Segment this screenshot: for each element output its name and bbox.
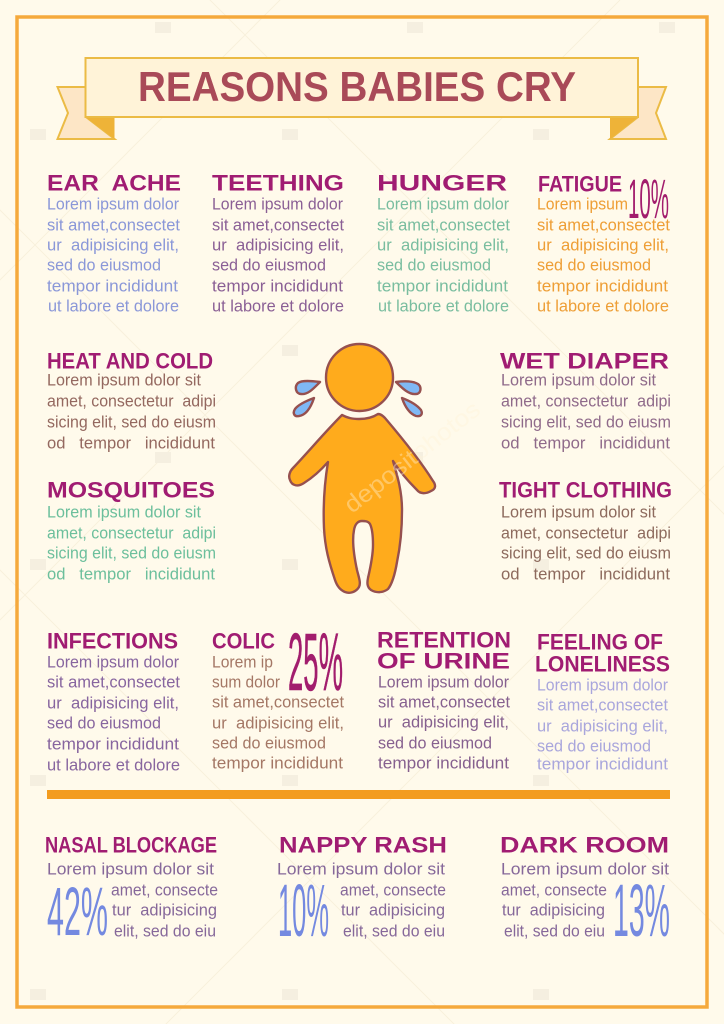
panel: mosquitoes: MOSQUITOES <box>47 478 215 502</box>
panel: tight clothing: Lorem ipsum dolor sit <box>501 504 656 522</box>
panel: retention of urine: OF URINE <box>377 648 510 674</box>
panel: hunger: Lorem ipsum dolor <box>377 196 509 214</box>
panel: fatigue <box>537 167 670 316</box>
panel: nasal blockage: amet, consecte <box>111 882 218 900</box>
panel: nasal blockage: Lorem ipsum dolor sit <box>47 861 214 879</box>
ribbon tail left <box>58 87 114 139</box>
panel: nappy rash: tur adipisicing <box>341 902 445 920</box>
panel: dark room: Lorem ipsum dolor sit <box>501 861 669 879</box>
panel: heat and cold: sicing elit, sed do eiusm <box>47 414 216 432</box>
watermark: depositphotos <box>339 396 486 519</box>
panel: hunger: tempor incididunt <box>377 278 508 296</box>
panel: nappy rash: Lorem ipsum dolor sit <box>277 861 445 879</box>
panel: feeling of loneliness: sit amet,consectet <box>537 697 668 715</box>
panel: dark room: DARK ROOM <box>500 832 669 858</box>
panel: nasal blockage <box>45 832 218 950</box>
panel: tight clothing: sicing elit, sed do eiusm <box>501 545 671 563</box>
panel: heat and cold: HEAT AND COLD <box>47 348 213 374</box>
panel: heat and cold: Lorem ipsum dolor sit <box>47 372 201 390</box>
panel: colic: tempor incididunt <box>212 755 343 773</box>
panel: feeling of loneliness: ur adipisicing elit, <box>537 718 668 736</box>
panel: infections: ut labore et dolore <box>47 757 180 775</box>
panel: ear ache: ur adipisicing elit, <box>47 237 179 255</box>
panel: teething: ur adipisicing elit, <box>212 237 344 255</box>
panel: retention of urine: sit amet,consectet <box>378 694 510 712</box>
panel: ear ache <box>47 170 181 316</box>
panel: teething: Lorem ipsum dolor <box>212 196 343 214</box>
panel: infections: sit amet,consectet <box>47 674 180 692</box>
panel: feeling of loneliness: Lorem ipsum dolor <box>537 677 668 695</box>
panel: dark room <box>500 832 670 952</box>
panel: fatigue: tempor incididunt <box>537 278 668 296</box>
section divider <box>47 790 670 799</box>
panel: mosquitoes <box>47 478 216 584</box>
panel: infections <box>47 628 180 775</box>
panel: ear ache: sit amet,consectet <box>47 217 180 235</box>
panel: infections: sed do eiusmod <box>47 715 161 733</box>
panel: hunger: sed do eiusmod <box>377 257 491 275</box>
panel: ear ache: ut labore et dolore <box>48 298 179 316</box>
panel: nasal blockage: tur adipisicing <box>112 902 217 920</box>
panel: wet diaper: Lorem ipsum dolor sit <box>501 372 656 390</box>
panel: tight clothing: amet, consectetur adipi <box>501 525 671 543</box>
ribbon main <box>86 58 638 117</box>
panel: retention of urine: RETENTION <box>377 628 511 652</box>
panel: fatigue: sit amet,consectet <box>537 217 670 235</box>
panel: infections: Lorem ipsum dolor <box>47 654 179 672</box>
tear drop upper left <box>296 381 320 394</box>
panel: wet diaper <box>500 348 671 453</box>
panel: retention of urine: ur adipisicing elit, <box>378 714 509 732</box>
panel: teething: sit amet,consectet <box>212 217 344 235</box>
panel: nappy rash: elit, sed do eiu <box>343 923 445 941</box>
panel: retention of urine: tempor incididunt <box>378 755 509 773</box>
text: 25% <box>288 617 343 708</box>
panel: nappy rash: amet, consecte <box>340 882 446 900</box>
panel: teething: tempor incididunt <box>212 278 343 296</box>
panel: fatigue: ur adipisicing elit, <box>537 237 669 255</box>
panel: hunger: ut labore et dolore <box>378 298 509 316</box>
panel: retention of urine <box>377 628 511 773</box>
panel: mosquitoes: Lorem ipsum dolor sit <box>47 504 201 522</box>
title: REASONS BABIES CRY <box>138 63 576 110</box>
panel: fatigue: FATIGUE <box>538 172 622 196</box>
panel: colic: sed do eiusmod <box>212 735 326 753</box>
panel: colic: COLIC <box>212 628 275 654</box>
panel: fatigue: sed do eiusmod <box>537 257 651 275</box>
panel: nappy rash: NAPPY RASH <box>279 832 447 858</box>
panel: ear ache: tempor incididunt <box>47 278 178 296</box>
panel: hunger: sit amet,consectet <box>377 217 510 235</box>
ribbon fold left <box>86 117 114 139</box>
panel: feeling of loneliness: LONELINESS <box>535 652 670 676</box>
panel: wet diaper: WET DIAPER <box>500 348 669 374</box>
panel: fatigue: Lorem ipsum <box>537 196 628 214</box>
panel: feeling of loneliness <box>535 630 670 774</box>
panel: dark room: amet, consecte <box>501 882 607 900</box>
baby body <box>289 414 435 593</box>
panel: heat and cold <box>47 348 216 453</box>
panel: hunger <box>377 170 510 316</box>
panel: fatigue: ut labore et dolore <box>537 298 669 316</box>
panel: wet diaper: sicing elit, sed do eiusm <box>501 414 671 432</box>
panel: teething: sed do eiusmod <box>212 257 326 275</box>
panel: hunger: ur adipisicing elit, <box>377 237 509 255</box>
panel: teething: ut labore et dolore <box>212 298 344 316</box>
panel: wet diaper: od tempor incididunt <box>501 435 670 453</box>
panel: ear ache: sed do eiusmod <box>47 257 161 275</box>
panel: nasal blockage: NASAL BLOCKAGE <box>45 832 217 858</box>
ribbon tail right <box>610 87 666 139</box>
tear drop lower left <box>294 398 314 416</box>
tear drop lower right <box>402 398 422 416</box>
ribbon fold right <box>610 117 638 139</box>
panel: colic <box>212 617 344 773</box>
panel: hunger: HUNGER <box>377 170 507 196</box>
panel: ear ache: Lorem ipsum dolor <box>47 196 179 214</box>
panel: colic: ur adipisicing elit, <box>212 715 344 733</box>
panel: teething <box>212 170 344 316</box>
panel: infections: ur adipisicing elit, <box>47 695 179 713</box>
panel: dark room: tur adipisicing <box>502 902 605 920</box>
panel: ear ache: EAR ACHE <box>47 170 181 196</box>
panel: dark room: elit, sed do eiu <box>504 923 605 941</box>
title banner <box>58 58 666 139</box>
panel: nasal blockage: 42% <box>47 873 108 950</box>
panel: infections: INFECTIONS <box>47 628 178 654</box>
panel: infections: tempor incididunt <box>47 736 179 754</box>
panel: colic: sum dolor <box>212 674 280 692</box>
panel: tight clothing <box>499 478 672 584</box>
tear drop upper right <box>396 381 420 394</box>
panel: nappy rash: 10% <box>278 869 329 952</box>
panel: mosquitoes: amet, consectetur adipi <box>47 525 216 543</box>
panel: wet diaper: amet, consectetur adipi <box>501 393 671 411</box>
panel: feeling of loneliness: sed do eiusmod <box>537 738 651 756</box>
panel: colic: sit amet,consectet <box>212 694 344 712</box>
panel: heat and cold: od tempor incididunt <box>47 435 215 453</box>
panel: heat and cold: amet, consectetur adipi <box>47 393 216 411</box>
panel: feeling of loneliness: tempor incididunt <box>537 756 668 774</box>
panel: feeling of loneliness: FEELING OF <box>537 630 663 654</box>
panel: retention of urine: Lorem ipsum dolor <box>378 674 509 692</box>
panel: teething: TEETHING <box>212 170 344 196</box>
icon: crying baby <box>289 344 435 593</box>
panel: nasal blockage: elit, sed do eiu <box>114 923 216 941</box>
panel: mosquitoes: od tempor incididunt <box>47 566 215 584</box>
panel: tight clothing: TIGHT CLOTHING <box>499 478 672 502</box>
panel: retention of urine: sed do eiusmod <box>378 735 492 753</box>
panel: mosquitoes: sicing elit, sed do eiusm <box>47 545 216 563</box>
panel: colic: Lorem ip <box>212 654 273 672</box>
panel: tight clothing: od tempor incididunt <box>501 566 670 584</box>
baby head <box>326 344 393 411</box>
panel: nappy rash <box>277 832 447 952</box>
